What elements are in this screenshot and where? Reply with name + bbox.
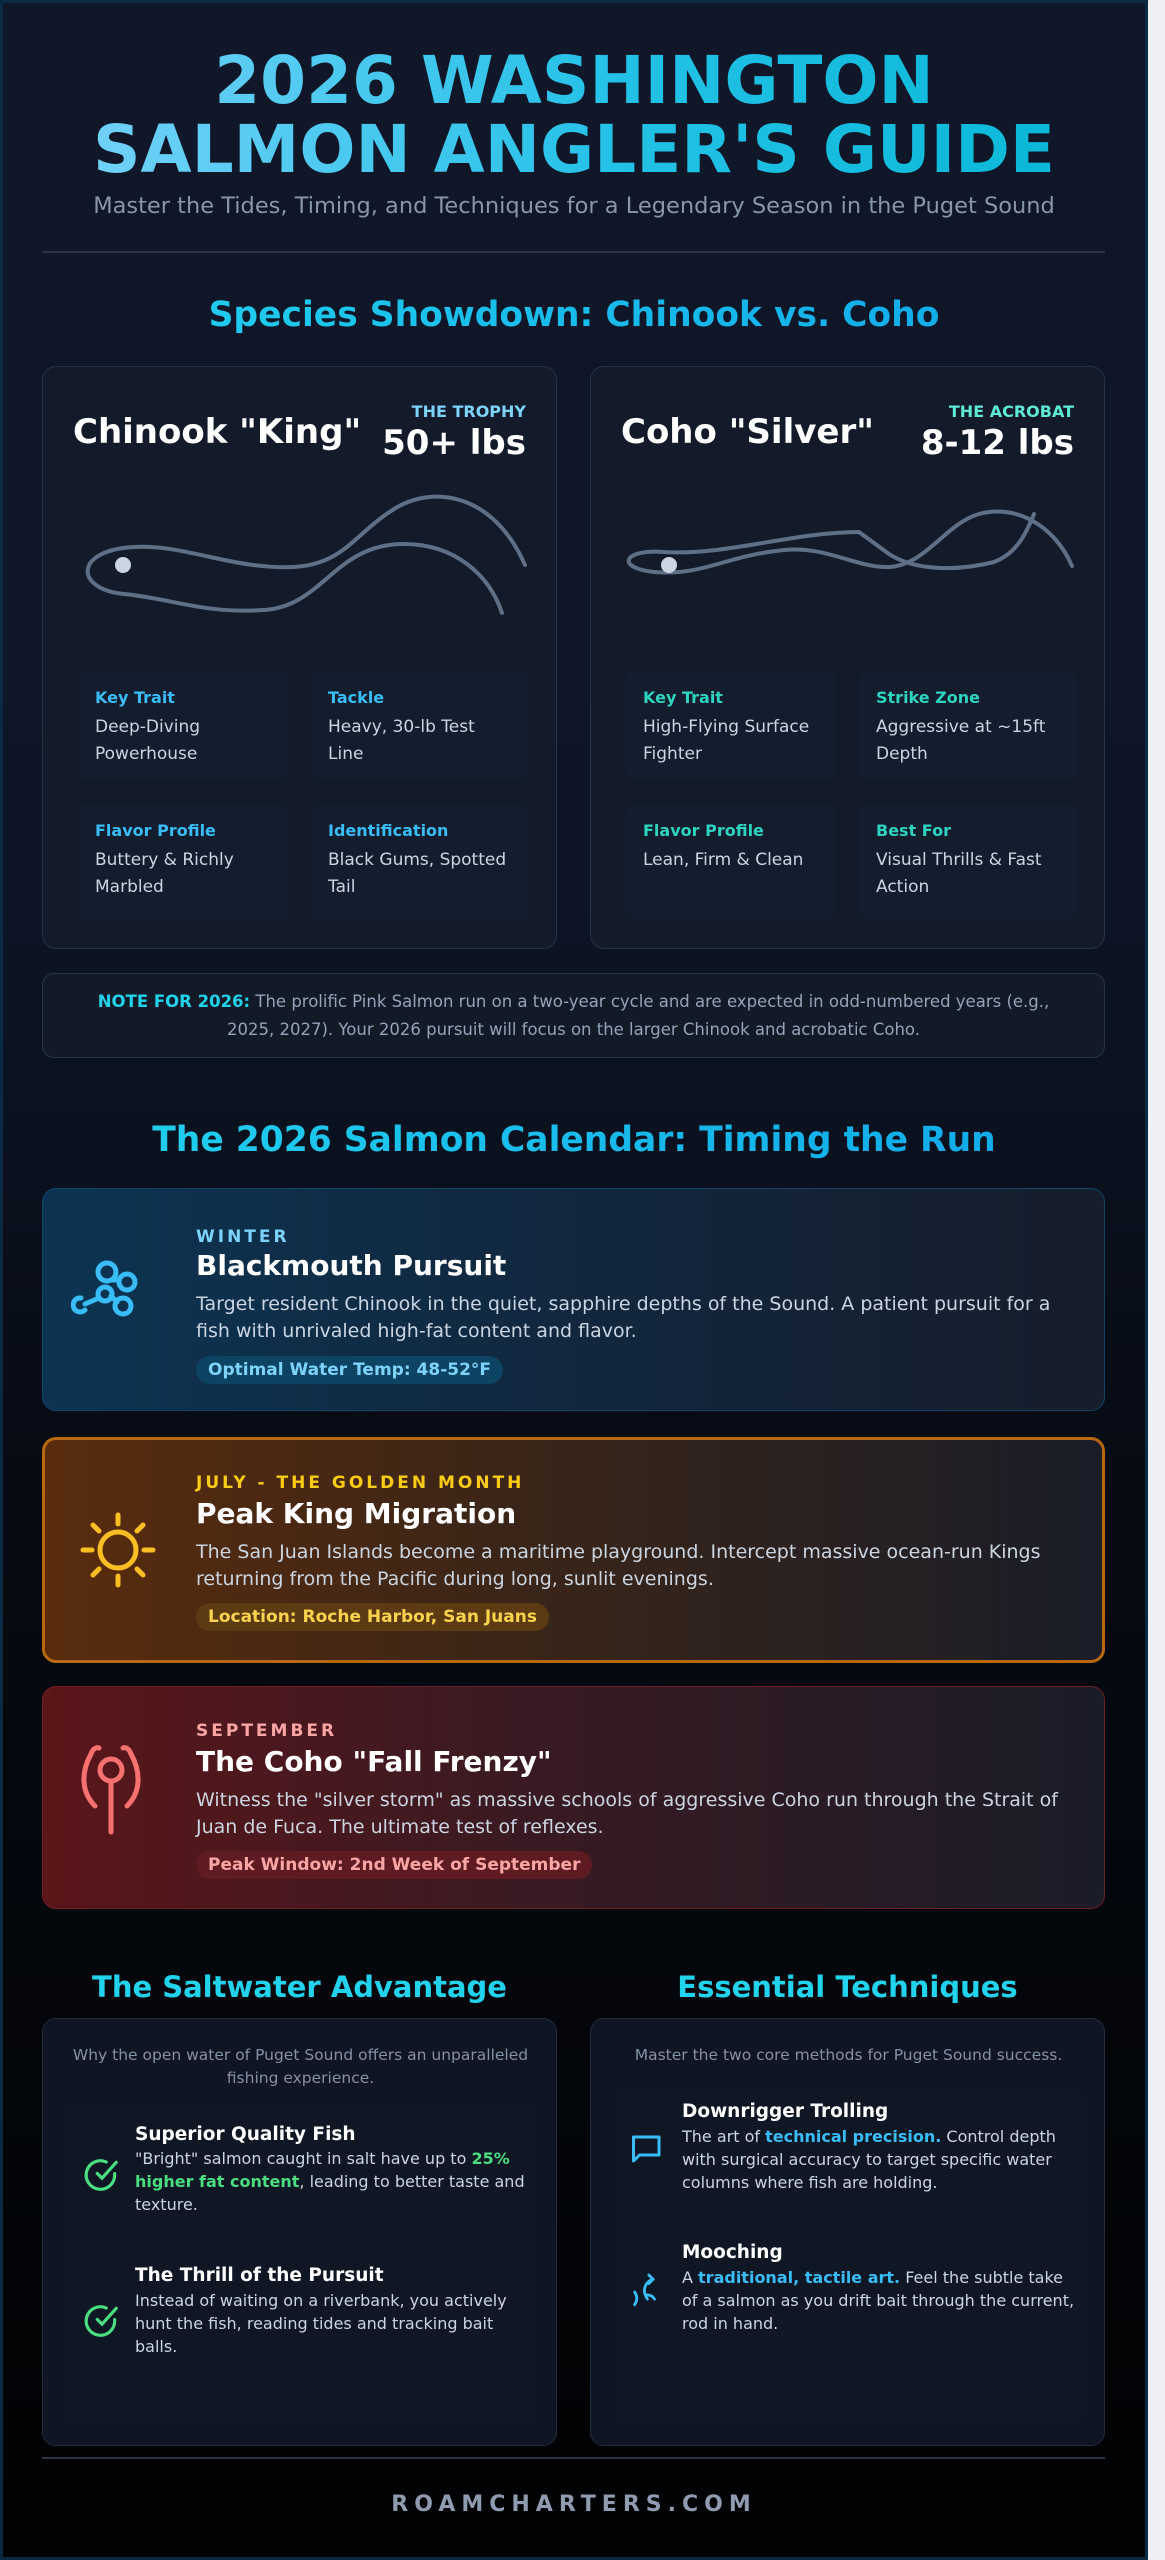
- heading: species showdown: Species Showdown: Chinook vs. Coho: [209, 295, 939, 335]
- item: mooching: [633, 2242, 1074, 2333]
- subtitle: Master the Tides, Timing, and Techniques for a Legendary Season in the Puget Sound: [93, 193, 1055, 219]
- trait: best for: Visual Thrills & Fast Action: [876, 850, 1042, 897]
- label: WINTER: [196, 1227, 290, 1247]
- panel: coho: [590, 366, 1105, 949]
- icon: chat bubble: [632, 2136, 660, 2163]
- item: superior quality: [84, 2124, 525, 2214]
- description: The San Juan Islands become a maritime playground. Intercept massive ocean-run Kings returning from the Pacific during long, sunlit evenings.: [196, 1541, 1041, 1590]
- trait: flavor: Flavor Profile: [643, 821, 764, 840]
- pill: Peak Window: 2nd Week of September: [208, 1855, 580, 1875]
- icon: chinook fish: [86, 494, 527, 615]
- description: Target resident Chinook in the quiet, sapphire depths of the Sound. A patient pursuit for a fish with unrivaled high-fat content and flavor.: [196, 1293, 1050, 1342]
- trait: flavor: [626, 804, 836, 919]
- icon: sun: [80, 1512, 156, 1588]
- trait: identification: [311, 804, 529, 919]
- trait: strike zone: [859, 671, 1077, 780]
- item: mooching: Mooching: [682, 2242, 783, 2263]
- trait: key trait: [626, 671, 836, 780]
- chinook weight: [382, 402, 526, 463]
- item: superior quality: Superior Quality Fish: [135, 2124, 356, 2145]
- trait: identification: Identification: [328, 821, 448, 840]
- trait: identification: Black Gums, Spotted Tail: [328, 850, 506, 897]
- coho title: Coho "Silver": [621, 412, 874, 452]
- icon: mooching: [633, 2274, 656, 2306]
- heading: essential techniques: Essential Techniques: [677, 1970, 1018, 2004]
- item: downrigger: [632, 2101, 1056, 2192]
- icon: bubbles: [71, 1260, 138, 1316]
- pill: [196, 1603, 549, 1631]
- description: Witness the "silver storm" as massive schools of aggressive Coho run through the Strait of Juan de Fuca. The ultimate test of reflexes.: [196, 1789, 1058, 1838]
- coho weight: THE ACROBAT: [949, 402, 1074, 421]
- trait: flavor: Flavor Profile: [95, 821, 216, 840]
- card title: Blackmouth Pursuit: [196, 1249, 506, 1282]
- trait: key trait: High-Flying Surface Fighter: [643, 717, 809, 764]
- panel: chinook: [42, 366, 557, 949]
- item: thrill: Instead of waiting on a riverbank, you actively hunt the fish, reading tides and tracking bait balls.: [135, 2291, 507, 2356]
- item: mooching: A traditional, tactile art. Feel the subtle take of a salmon as you drift bait through the current, rod in hand.: [682, 2268, 1074, 2333]
- trait: flavor: Buttery & Richly Marbled: [95, 850, 234, 897]
- intro text: Why the open water of Puget Sound offers an unparalleled fishing experience.: [73, 2046, 528, 2087]
- panel: essential techniques: [590, 2018, 1105, 2446]
- trait: key trait: Key Trait: [95, 688, 175, 707]
- trait: tackle: Heavy, 30-lb Test Line: [328, 717, 475, 764]
- trait: key trait: [78, 671, 288, 780]
- label: JULY - THE GOLDEN MONTH: [196, 1473, 524, 1493]
- title: 2026 WASHINGTON: [214, 42, 934, 119]
- trait: flavor: Lean, Firm & Clean: [643, 850, 803, 870]
- heading: calendar: The 2026 Salmon Calendar: Timing the Run: [152, 1120, 996, 1160]
- item: superior quality: "Bright" salmon caught in salt have up to 25% higher fat content, leading to better taste and texture.: [135, 2149, 525, 2214]
- trait: best for: [859, 804, 1077, 919]
- heading: species showdown: [3, 295, 1145, 335]
- label: SEPTEMBER: [196, 1721, 337, 1741]
- pill: Optimal Water Temp: 48-52°F: [208, 1360, 491, 1380]
- panel: saltwater advantage: [42, 2018, 557, 2446]
- icon: hook: [81, 1745, 141, 1834]
- item: downrigger: Downrigger Trolling: [682, 2101, 888, 2122]
- footer: ROAMCHARTERS.COM: [391, 2492, 757, 2517]
- coho weight: [921, 402, 1074, 463]
- trait: flavor: [78, 804, 288, 919]
- intro text: Master the two core methods for Puget Sound success.: [635, 2046, 1062, 2064]
- trait: strike zone: Aggressive at ~15ft Depth: [876, 717, 1045, 764]
- chinook weight: THE TROPHY: [412, 402, 526, 421]
- pill: [196, 1356, 503, 1384]
- trait: tackle: Tackle: [328, 688, 384, 707]
- callout: note for 2026: [42, 973, 1105, 1058]
- item: thrill: The Thrill of the Pursuit: [135, 2265, 384, 2286]
- trait: strike zone: Strike Zone: [876, 688, 980, 707]
- item: downrigger: The art of technical precision. Control depth with surgical accuracy to target specific water columns where fish are holding.: [682, 2127, 1056, 2192]
- coho weight: 8-12 lbs: [921, 423, 1074, 463]
- pill: [196, 1851, 592, 1879]
- trait: key trait: Key Trait: [643, 688, 723, 707]
- card title: Peak King Migration: [196, 1497, 516, 1530]
- card title: The Coho "Fall Frenzy": [196, 1745, 552, 1778]
- panel: september: [42, 1686, 1105, 1909]
- trait: best for: Best For: [876, 821, 951, 840]
- panel: july: [42, 1437, 1105, 1663]
- chinook title: Chinook "King": [73, 412, 361, 452]
- panel: winter: [42, 1188, 1105, 1411]
- item: thrill: [84, 2265, 507, 2356]
- icon: check: [84, 2305, 118, 2337]
- heading: saltwater advantage: The Saltwater Advantage: [92, 1970, 507, 2004]
- icon: check: [84, 2159, 118, 2191]
- chinook weight: 50+ lbs: [382, 423, 526, 463]
- trait: tackle: [311, 671, 529, 780]
- title: [3, 46, 1145, 184]
- title: SALMON ANGLER'S GUIDE: [93, 111, 1055, 188]
- callout: note for 2026: NOTE FOR 2026: The prolific Pink Salmon run on a two-year cycle and are expected in odd-numbered years (e.g., 2025, 2027). Your 2026 pursuit will focus on the larger Chinook and acrobatic Coho.: [98, 992, 1049, 1039]
- pill: Location: Roche Harbor, San Juans: [208, 1607, 537, 1627]
- trait: key trait: Deep-Diving Powerhouse: [95, 717, 200, 764]
- icon: coho fish: [626, 510, 1074, 574]
